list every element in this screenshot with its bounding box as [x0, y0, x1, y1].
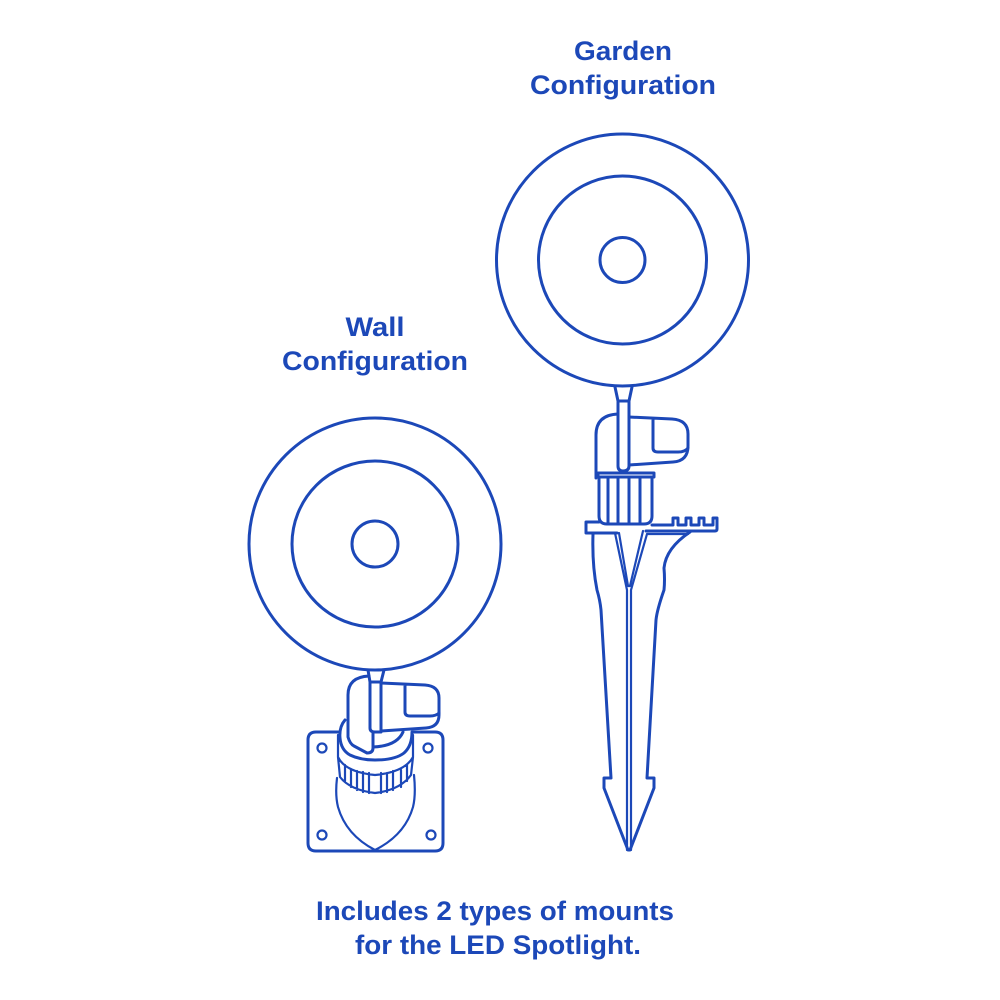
stake body: [593, 532, 690, 850]
caption: [316, 896, 674, 960]
wall plate: [308, 732, 443, 851]
illustration: garden spotlight: [496, 134, 748, 850]
caption: for the LED Spotlight.: [355, 930, 641, 960]
lamp head circles: [496, 134, 748, 386]
bracket arm: [348, 676, 439, 753]
heading: wall configuration: [282, 312, 468, 376]
illustration: wall spotlight: [249, 418, 501, 851]
mounting holes: [318, 744, 436, 840]
bracket arm: [596, 414, 688, 478]
stake central rib: [615, 531, 688, 850]
heading: garden configuration: Garden: [574, 36, 672, 66]
heading: wall configuration: Configuration: [282, 346, 468, 376]
heading: wall configuration: Wall: [346, 312, 404, 342]
heading: garden configuration: Configuration: [530, 70, 716, 100]
heading: garden configuration: [530, 36, 716, 100]
caption: Includes 2 types of mounts: [316, 896, 674, 926]
ribbed collar: [598, 473, 654, 524]
lamp head circles: [249, 418, 501, 670]
stem: [615, 387, 632, 471]
collar rings: [340, 720, 412, 760]
mounting plate with teeth: [586, 518, 717, 533]
knurled ring: [338, 735, 413, 793]
lower housing: [336, 775, 415, 850]
stem: [368, 670, 384, 732]
